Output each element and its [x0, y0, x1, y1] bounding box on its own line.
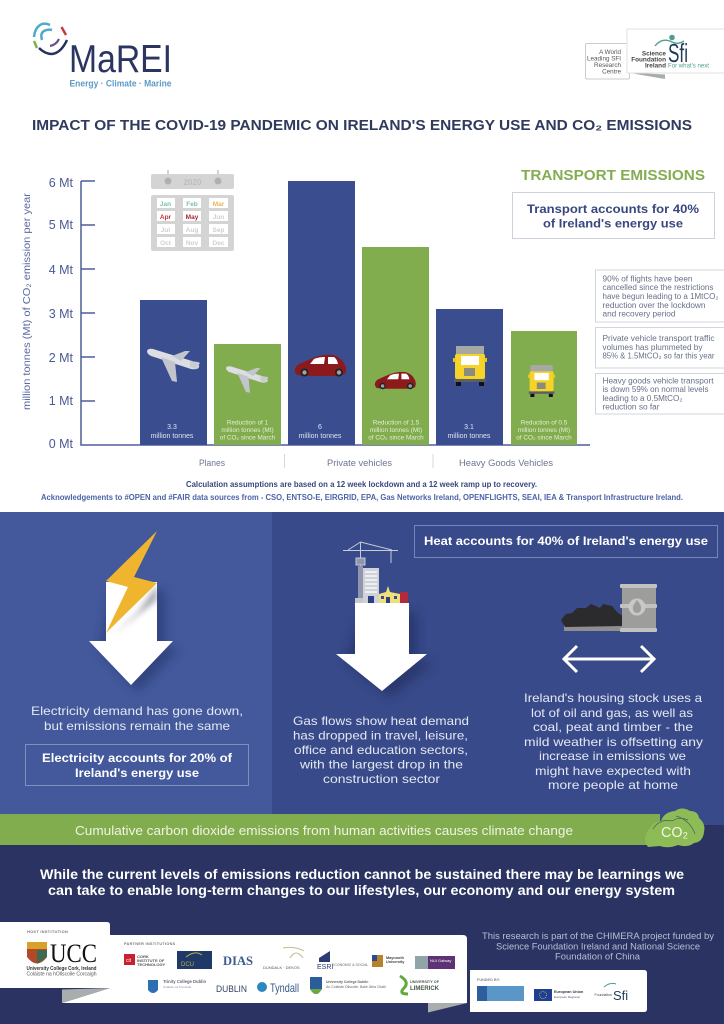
callout: transport share: [512, 192, 714, 238]
icon: heat down arrow: [336, 603, 435, 698]
text: funding statement: [482, 931, 715, 962]
logo: ESRI: ECONOMIC & SOCIAL: [332, 963, 368, 967]
bar labels: million tonnes: [448, 433, 491, 440]
calendar 2020: [151, 170, 234, 251]
logo: SFI research centre badge: Centre: [602, 68, 621, 76]
text: funding statement: Science Foundation Ireland and National Science: [496, 942, 700, 952]
y axis scale: 6 Mt: [49, 176, 74, 190]
logo: MaREI: MaREI: [69, 38, 172, 81]
icon: construction skyline: [343, 542, 408, 603]
text: gas flows: [293, 714, 469, 786]
calendar 2020: Oct: [160, 240, 172, 247]
logo: UCD: An Coláiste Ollscoile, Baile Átha Cliath: [326, 985, 386, 989]
reduction labels: [220, 420, 572, 442]
footnote: calculation assumptions: Calculation assumptions are based on a 12 week lockdown and a 12 week ramp up to recovery.: [186, 480, 537, 489]
text: gas flows: office and education sectors,: [294, 743, 468, 757]
logo: UCD: [310, 977, 386, 994]
calendar 2020: Jun: [213, 214, 224, 221]
bar: heavy goods reduction: [511, 331, 577, 445]
logo: University of Limerick: LIMERICK: [410, 986, 440, 992]
calendar 2020: Aug: [186, 227, 198, 234]
y axis scale: 2 Mt: [49, 351, 74, 365]
icon: car small: [375, 372, 416, 389]
logo: CIT: cit: [126, 958, 132, 964]
note: heavy goods vehicles: [596, 374, 724, 414]
bar labels: million tonnes: [299, 433, 342, 440]
logo: DIAS: DIAS: [223, 953, 253, 968]
reduction labels: Reduction of 1: [227, 420, 269, 426]
logo: ESRI: ESRI: [317, 964, 333, 971]
panel: host institution: [0, 922, 110, 988]
note: flights: have begun leading to a 1MtCO₂: [602, 292, 718, 301]
logo: SFI research centre badge: Ireland: [645, 62, 666, 70]
y axis scale: 0 Mt: [49, 437, 74, 451]
text: housing stock: coal, peat and timber - the: [533, 720, 693, 734]
calendar 2020: Mar: [213, 201, 225, 208]
logo: European Union: European Regional: [554, 995, 580, 999]
logo: NUI Galway: NUI Galway: [430, 958, 451, 963]
logo: Tyndall: [257, 981, 299, 995]
panel: heat: [272, 512, 724, 825]
bar: private vehicles total: [288, 181, 355, 445]
text: funding statement: This research is part of the CHIMERA project funded by: [482, 931, 715, 941]
y axis scale: 3 Mt: [49, 307, 74, 321]
logo: Irish government funding: [477, 986, 524, 1001]
panel: footer background: [0, 825, 724, 1024]
logo: Dunsink: DUNDALK · DEKOS: [263, 965, 300, 970]
logo: CIT: TECHNOLOGY: [137, 962, 166, 967]
bar labels: 3.1: [464, 424, 474, 431]
reduction labels: million tonnes (Mt): [370, 427, 422, 434]
text: housing stock: lot of oil and gas, as well as: [531, 706, 693, 720]
text: gas flows: Gas flows show heat demand: [293, 714, 469, 728]
logo: SFI research centre badge: For what's next: [668, 64, 709, 70]
icon: truck small: [528, 365, 555, 397]
text: gas flows: with the largest drop in the: [299, 758, 463, 772]
banner: climate change: Cumulative carbon dioxide emissions from human activities causes climate change: [75, 823, 573, 838]
reduction labels: million tonnes (Mt): [518, 427, 570, 434]
key message: [40, 867, 685, 898]
logo: MaREI: [34, 24, 172, 89]
icon: plane small: [226, 366, 268, 393]
icon: CO2 cloud: [645, 808, 704, 847]
logo: UCC wordmark: Coláiste na hOllscoile Corcaigh: [26, 972, 97, 978]
note: heavy goods vehicles: is down 59% on normal levels: [602, 385, 709, 394]
bar: private vehicles reduction: [362, 247, 429, 445]
note: private vehicles: [596, 328, 724, 368]
logo: European Union: [534, 989, 584, 1001]
logo: UCC wordmark: [26, 939, 97, 978]
calendar 2020: Sep: [213, 227, 224, 234]
logo: Maynooth: University: [386, 960, 405, 964]
y axis scale: [49, 176, 590, 451]
callout: electricity share: Electricity accounts for 20% of: [42, 751, 233, 765]
panel: host institution: HOST INSTITUTION: [27, 929, 68, 934]
reduction labels: Reduction of 1.5: [373, 420, 420, 426]
note: private vehicles: volumes has plummeted by: [602, 343, 703, 352]
logo: DCU: DCU: [181, 962, 194, 968]
panel: partner institutions: PARTNER INSTITUTIONS: [124, 942, 176, 946]
bar: heavy goods total: [436, 309, 503, 445]
text: electricity demand: but emissions remain the same: [44, 719, 230, 733]
category labels: [199, 454, 554, 468]
logo: CIT: CORK: [137, 954, 149, 959]
callout: electricity share: [26, 744, 248, 786]
logo: Maynooth: Maynooth: [386, 956, 405, 960]
logo: SFI research centre badge: Research: [594, 62, 621, 69]
text: electricity demand: Electricity demand has gone down,: [31, 704, 243, 718]
icon: car large: [295, 355, 346, 376]
logo: SFI research centre badge: Foundation: [631, 56, 666, 64]
category labels: Heavy Goods Vehicles: [459, 458, 554, 468]
note: flights: and recovery period: [602, 310, 676, 318]
text: housing stock: Ireland's housing stock uses a: [524, 691, 702, 705]
logo: Trinity: Trinity College Dublin: [163, 979, 206, 984]
bar labels: [151, 424, 491, 440]
y axis scale: 4 Mt: [49, 263, 74, 277]
key message: can take to enable long-term changes to our lifestyles, our economy and our energy system: [48, 883, 675, 898]
bar chart: transport emissions: [21, 176, 590, 468]
logo: ESRI: [317, 951, 368, 971]
logo: SFI research centre badge: Science: [642, 50, 666, 58]
callout: heat share: [414, 526, 718, 558]
note: flights: [596, 270, 724, 322]
panel: funders: [470, 970, 647, 1012]
logo: SFI: Sfi: [613, 988, 628, 1003]
note: private vehicles: 85% & 1.5MtCO₂ so far this year: [602, 352, 715, 360]
logo: DCU: [177, 951, 212, 969]
callout: electricity share: Ireland's energy use: [75, 766, 199, 780]
logo: NUI Galway: [415, 956, 455, 969]
calendar 2020: Jan: [160, 201, 171, 208]
logo: CIT: [124, 954, 166, 967]
calendar 2020: 2020: [184, 178, 202, 187]
panel: electricity: [0, 512, 272, 814]
logo: Dunsink: [263, 947, 304, 970]
bar: planes total: [140, 300, 207, 445]
logo: UCD: University College Dublin: [326, 980, 368, 984]
logo: University of Limerick: UNIVERSITY OF: [410, 980, 440, 984]
text: electricity demand: [31, 704, 243, 733]
icon: double-headed arrow: [564, 646, 654, 672]
logo: MaREI: Energy · Climate · Marine: [70, 78, 172, 88]
text: housing stock: mild weather is offsetting any: [524, 735, 703, 749]
calendar 2020: Feb: [186, 201, 198, 208]
note: flights: reduction over the lockdown: [602, 301, 706, 310]
calendar 2020: Jul: [161, 227, 170, 234]
heading: transport emissions: TRANSPORT EMISSIONS: [521, 168, 705, 184]
bar: planes reduction: [214, 344, 281, 445]
title: IMPACT OF THE COVID-19 PANDEMIC ON IRELAND'S ENERGY USE AND CO₂ EMISSIONS: [32, 118, 692, 134]
reduction labels: of CO₂ since March: [516, 434, 572, 442]
note: heavy goods vehicles: reduction so far: [602, 402, 660, 412]
reduction labels: Reduction of 0.5: [521, 420, 568, 426]
logo: SFI research centre badge: Sfi: [668, 38, 688, 68]
logo: UCC crest: [27, 942, 47, 964]
note: private vehicles: Private vehicle transport traffic: [602, 334, 715, 343]
logo: SFI research centre badge: Leading SFI: [587, 56, 621, 62]
bar labels: 6: [318, 424, 322, 431]
note: flights: cancelled since the restrictions: [602, 283, 714, 292]
bar labels: 3.3: [167, 424, 177, 431]
icon: electricity down arrow: [89, 531, 180, 692]
category labels: Planes: [199, 458, 226, 468]
icon: truck large: [453, 346, 487, 386]
calendar 2020: May: [186, 214, 199, 221]
note: flights: 90% of flights have been: [602, 274, 692, 284]
logo: SFI research centre badge: [586, 29, 724, 79]
logo: TU Dublin: DUBLIN: [216, 984, 247, 994]
text: housing stock: [524, 691, 703, 792]
text: housing stock: might have expected with: [535, 764, 691, 778]
icon: coal and oil barrel: [561, 584, 657, 632]
bar labels: million tonnes: [151, 433, 194, 440]
text: gas flows: construction sector: [323, 772, 440, 786]
logo: SFI research centre badge: A World: [599, 49, 621, 56]
text: housing stock: more people at home: [548, 778, 678, 792]
reduction labels: of CO₂ since March: [368, 434, 424, 442]
icon: CO2 cloud: CO₂: [661, 824, 688, 841]
text: funding statement: Foundation of China: [555, 952, 640, 962]
reduction labels: million tonnes (Mt): [221, 427, 274, 434]
note: heavy goods vehicles: leading to a 0.5MtCO₂: [602, 394, 682, 403]
logo: SFI: Foundation: [594, 993, 612, 997]
logo: SFI: [594, 983, 628, 1003]
logo: Trinity: Coláiste na Tríonóide: [163, 985, 192, 989]
logo: Trinity: [148, 979, 206, 993]
calendar 2020: Dec: [213, 240, 225, 247]
note: heavy goods vehicles: Heavy goods vehicle transport: [602, 376, 714, 386]
category labels: Private vehicles: [327, 458, 393, 468]
text: gas flows: has dropped in travel, leisure,: [293, 728, 468, 742]
key message: While the current levels of emissions reduction cannot be sustained there may be learnings we: [40, 867, 685, 882]
logo: Maynooth: [372, 955, 405, 967]
y axis title: million tonnes (Mt) of CO₂ emission per year: [21, 192, 33, 410]
icon: plane large: [147, 349, 200, 382]
panel: partner institutions: [62, 935, 467, 1012]
y axis scale: 5 Mt: [49, 218, 74, 232]
y axis scale: 1 Mt: [49, 394, 74, 408]
reduction labels: of CO₂ since March: [220, 434, 276, 442]
footnote: acknowledgements: Acknowledgements to #OPEN and #FAIR data sources from - CSO, ENTSO-E, EIRGRID, EPA, Gas Networks Ireland, OPENFLIGHTS, SEAI, IEA & Transport Infrastructure Ireland.: [41, 493, 683, 502]
text: housing stock: increase in emissions we: [539, 749, 686, 763]
callout: heat share: Heat accounts for 40% of Ireland's energy use: [424, 534, 708, 548]
logo: CIT: INSTITUTE OF: [137, 958, 165, 963]
callout: transport share: of Ireland's energy use: [543, 216, 683, 230]
logo: UCC wordmark: UCC: [50, 939, 97, 968]
logo: Tyndall: Tyndall: [270, 981, 299, 995]
logo: UCC wordmark: University College Cork, Ireland: [26, 966, 96, 972]
callout: transport share: Transport accounts for 40%: [527, 202, 699, 216]
banner: climate change: [0, 814, 660, 845]
calendar 2020: Nov: [186, 240, 199, 247]
logo: University of Limerick: [400, 976, 440, 994]
calendar 2020: Apr: [160, 214, 172, 221]
panel: funders: FUNDED BY:: [477, 978, 500, 982]
logo: European Union: European Union: [554, 990, 584, 994]
